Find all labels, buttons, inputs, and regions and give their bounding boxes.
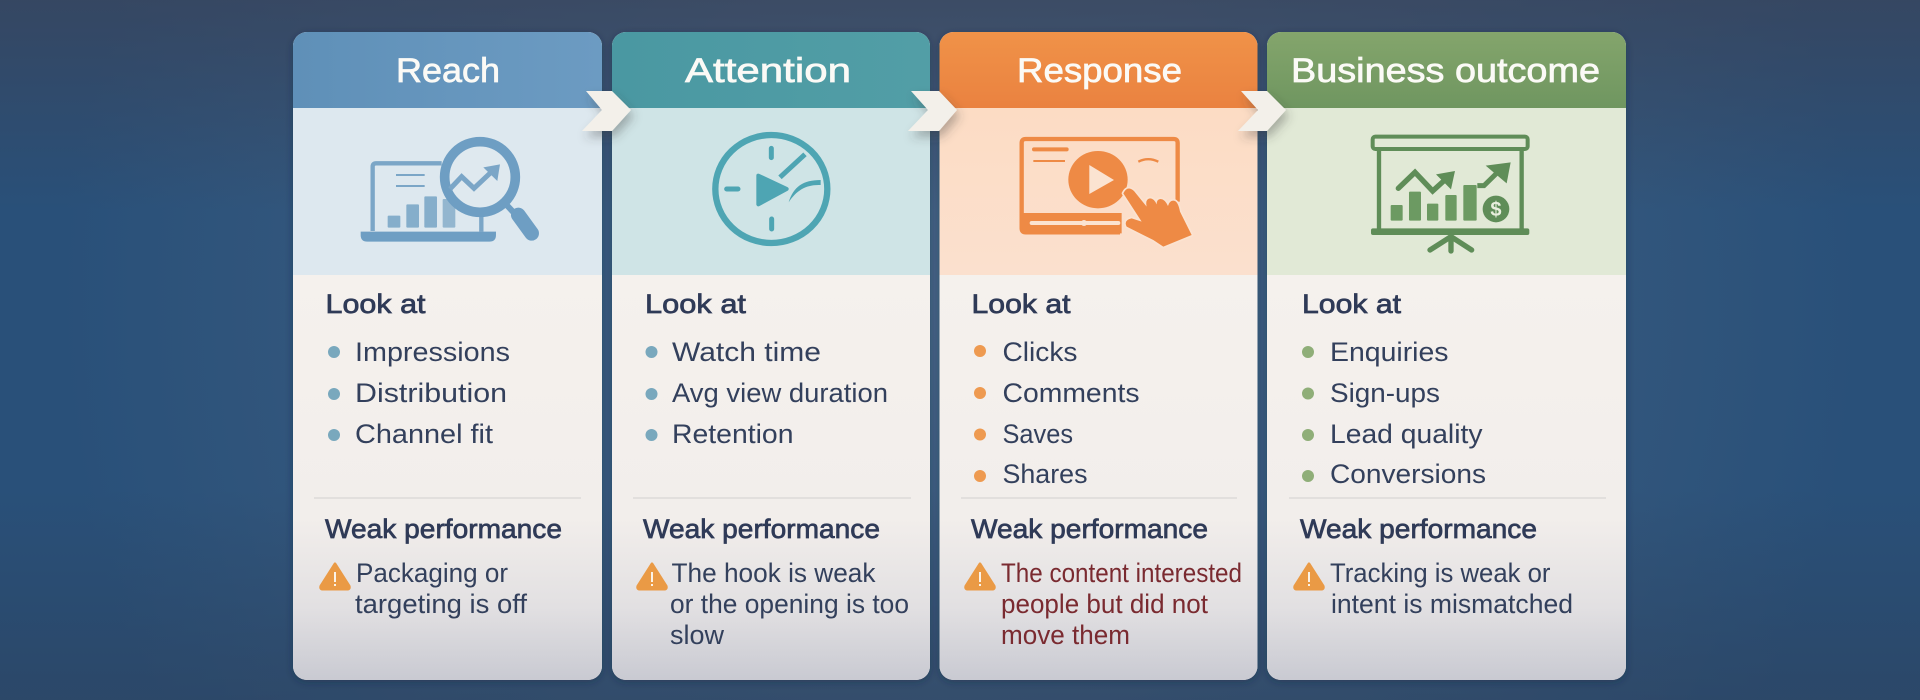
heading: Response: Response	[1017, 52, 1182, 90]
section: Weak performance: slow	[670, 620, 725, 650]
arrow: Response to Business outcome	[1238, 91, 1286, 131]
section: Look at: Impressions	[355, 337, 510, 367]
section: Look at: Lead quality	[1330, 419, 1483, 449]
section: Look at: Look at	[645, 289, 747, 319]
icon: presentation screen with chart: $	[1490, 199, 1502, 221]
section: Weak performance: Weak performance	[643, 514, 880, 544]
section: Look at: Distribution	[355, 378, 507, 408]
panel: Reach	[293, 32, 602, 680]
section: Look at	[972, 289, 1140, 489]
icon: presentation screen with chart	[1371, 137, 1529, 251]
section: Look at: Clicks	[1002, 337, 1078, 367]
panel: Response	[940, 32, 1258, 680]
section: Weak performance	[321, 514, 562, 619]
heading: Reach: Reach	[396, 52, 500, 90]
section: Look at: Conversions	[1330, 459, 1486, 489]
section: Weak performance: Packaging or	[356, 558, 508, 588]
section: Weak performance	[638, 514, 909, 650]
section: Look at: Channel fit	[355, 419, 494, 449]
section: Look at: Avg view duration	[672, 378, 888, 408]
section: Look at: Look at	[972, 289, 1071, 319]
section: Weak performance: The content interested	[1001, 558, 1242, 588]
heading: Attention: Attention	[685, 52, 851, 90]
section: Weak performance	[1295, 514, 1573, 619]
section: Look at: Retention	[672, 419, 794, 449]
section: Weak performance: move them	[1001, 620, 1130, 650]
section: Weak performance: intent is mismatched	[1331, 589, 1573, 619]
section: Weak performance: Weak performance	[325, 514, 562, 544]
icon: laptop and magnifier	[361, 142, 532, 242]
icon: video player with pointer hand	[1021, 139, 1192, 247]
section: Weak performance: Weak performance	[1300, 514, 1537, 544]
section: Look at	[1302, 289, 1486, 489]
section: Look at: Shares	[1002, 459, 1088, 489]
section: Weak performance: The hook is weak	[672, 558, 876, 588]
arrow: Attention to Response	[908, 91, 957, 131]
section: Weak performance: or the opening is too	[670, 589, 909, 619]
section: Weak performance	[966, 514, 1242, 650]
arrow: Reach to Attention	[582, 91, 631, 131]
section: Look at: Look at	[326, 289, 426, 319]
section: Look at: Watch time	[672, 337, 821, 367]
section: Look at: Enquiries	[1330, 337, 1448, 367]
section: Weak performance: Weak performance	[971, 514, 1208, 544]
icon: clock with play	[715, 135, 827, 243]
panel: Attention	[612, 32, 930, 680]
heading: Business outcome: Business outcome	[1291, 52, 1600, 90]
section: Look at: Saves	[1002, 419, 1073, 449]
section: Look at	[645, 289, 888, 449]
section: Weak performance: Tracking is weak or	[1330, 558, 1551, 588]
section: Look at	[326, 289, 510, 449]
section: Look at: Comments	[1002, 378, 1140, 408]
panel: Business outcome	[1267, 32, 1626, 680]
section: Look at: Look at	[1302, 289, 1402, 319]
section: Weak performance: people but did not	[1001, 589, 1209, 619]
section: Weak performance: targeting is off	[355, 589, 528, 619]
section: Look at: Sign-ups	[1330, 378, 1440, 408]
